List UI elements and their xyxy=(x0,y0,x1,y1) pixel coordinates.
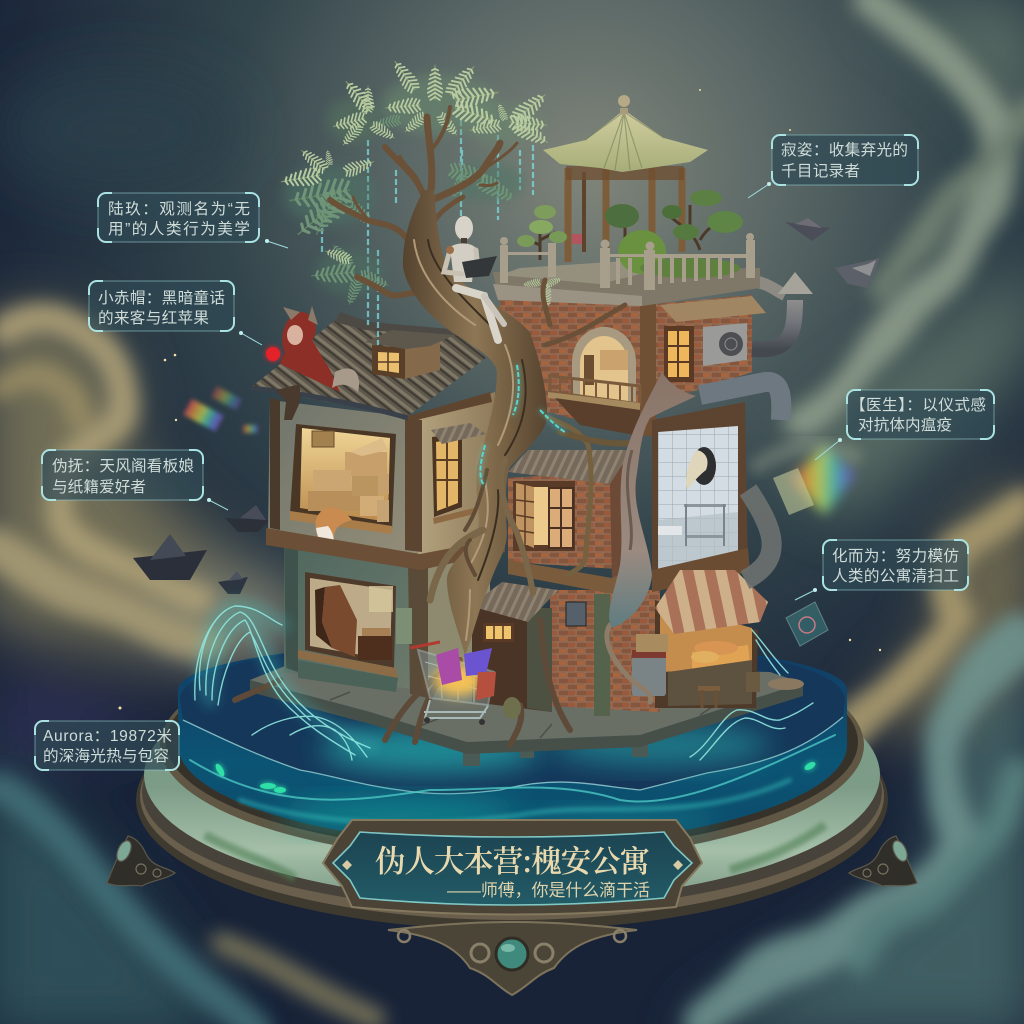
round window and balcony xyxy=(548,327,640,436)
label: 化而为 xyxy=(795,540,968,600)
label: 寂姿: 千目记录者 xyxy=(781,162,860,180)
side window xyxy=(431,423,486,524)
label: 化而为: 化而为：努力模仿 xyxy=(832,547,959,565)
roof xyxy=(250,318,486,416)
deck xyxy=(250,660,803,766)
shopping cart xyxy=(410,642,496,725)
floating card xyxy=(786,602,828,646)
foliage xyxy=(280,57,563,307)
lower floor xyxy=(284,540,420,690)
bonsai xyxy=(517,190,743,278)
label: Aurora: Aurora：19872米 xyxy=(43,727,172,745)
jade band xyxy=(144,649,880,901)
paper boats xyxy=(133,218,880,594)
label: Aurora xyxy=(35,721,179,770)
bronze lip xyxy=(160,629,864,861)
label: 陆玖 xyxy=(98,193,288,248)
label: 医生: 【医生】：以仪式感 xyxy=(850,396,986,414)
diamond ornaments xyxy=(342,860,683,870)
shop xyxy=(655,570,768,708)
small lit window xyxy=(664,326,694,382)
side ornament right xyxy=(849,836,917,886)
platform xyxy=(107,629,917,930)
middle window xyxy=(513,481,575,551)
label: 伪抚: 伪抚：天风阁看板娘 xyxy=(52,457,194,475)
lower window with coffin xyxy=(298,572,398,678)
dormer xyxy=(365,330,455,379)
label: 伪抚 xyxy=(42,450,228,510)
title text: 伪人大本营:槐安公寓 xyxy=(375,837,650,881)
side ornament left xyxy=(107,836,175,886)
clinic xyxy=(652,402,748,592)
label: 寂姿: 寂姿：收集弃光的 xyxy=(781,141,908,159)
label: 小赤帽 xyxy=(89,281,262,345)
label: 医生: 对抗体内瘟疫 xyxy=(858,416,952,434)
left house xyxy=(250,312,505,698)
terrace slab xyxy=(493,268,760,306)
right house xyxy=(470,268,813,716)
title plaque xyxy=(323,820,702,914)
upper awning xyxy=(660,296,766,322)
small house xyxy=(470,582,558,712)
plague mask xyxy=(692,447,716,485)
subtitle text: ——师傅，你是什么滴干活 xyxy=(447,881,650,900)
AC unit xyxy=(703,323,747,366)
label: 小赤帽: 小赤帽：黑暗童话 xyxy=(98,288,225,307)
label: 陆玖: 陆玖：观测名为“无 xyxy=(108,200,250,218)
glowing glints xyxy=(214,760,817,793)
middle brick xyxy=(508,470,632,570)
bronze lower ring xyxy=(136,670,888,930)
data streams xyxy=(322,120,533,345)
pipes xyxy=(700,282,795,580)
upper brick xyxy=(500,298,642,436)
bark xyxy=(414,240,526,640)
water top surface xyxy=(180,640,845,794)
roots xyxy=(235,305,651,745)
water body xyxy=(178,640,847,845)
glowing veins xyxy=(480,365,565,485)
glowing waves xyxy=(190,606,835,823)
label: 伪抚: 与纸籍爱好者 xyxy=(52,478,146,496)
trunk xyxy=(403,190,547,655)
big pale root xyxy=(609,372,696,628)
stools and stones xyxy=(503,672,804,719)
rainbow light right xyxy=(752,445,860,515)
label: Aurora: 的深海光热与包容 xyxy=(43,747,169,765)
rainbow light left xyxy=(183,386,258,433)
fox tail xyxy=(316,508,352,546)
storage window xyxy=(290,424,396,534)
label: 寂姿 xyxy=(748,135,918,198)
android figure reading xyxy=(444,216,504,340)
pagoda xyxy=(500,95,708,284)
upper wall xyxy=(268,400,418,560)
label: 陆玖: 用”的人类行为美学 xyxy=(108,220,250,238)
lower brick xyxy=(550,590,660,712)
label: 小赤帽: 的来客与红苹果 xyxy=(98,309,209,327)
bottom ornament xyxy=(388,922,637,995)
tree xyxy=(235,107,696,745)
floor beam xyxy=(266,528,505,570)
red riding hood xyxy=(266,306,359,420)
branches xyxy=(330,107,550,325)
label: 医生 xyxy=(815,390,994,460)
label: 化而为: 人类的公寓清扫工 xyxy=(832,567,959,585)
railing xyxy=(500,233,755,290)
